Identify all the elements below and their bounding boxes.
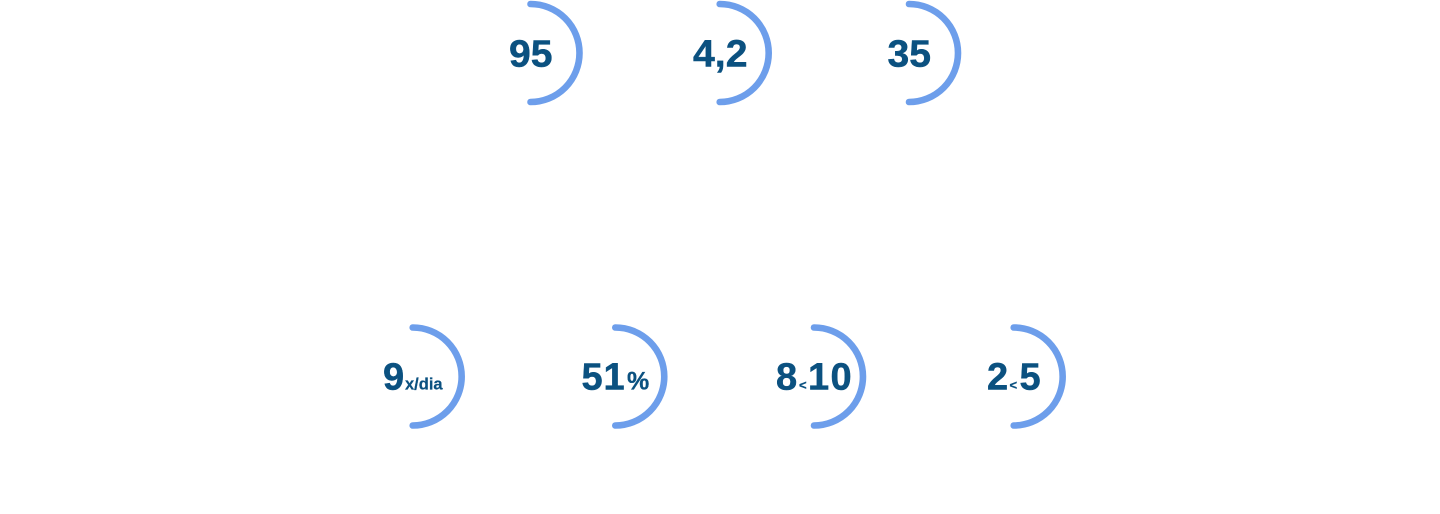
- stat: 51%: 1: [604, 356, 625, 398]
- stat: 8 to 10: 1: [808, 356, 829, 398]
- stat: 8 to 10: <: [799, 378, 807, 392]
- stat: 95: 95: [509, 34, 552, 76]
- stat: 9 x/dia: [383, 328, 462, 426]
- stat: 8 to 10: [776, 328, 863, 426]
- stat: 4,2: 4,2: [693, 34, 748, 76]
- stat: 8 to 10: 8: [776, 356, 797, 398]
- stat: 35: 35: [888, 34, 931, 76]
- stat: 51%: [582, 328, 664, 426]
- stat: 8 to 10: 0: [830, 356, 852, 398]
- stat: 2 to 5: [987, 328, 1063, 426]
- stat: 9 x/dia: x/dia: [405, 376, 443, 394]
- stat: 4,2: [693, 4, 769, 102]
- stat: 51%: 5: [582, 356, 603, 398]
- stat: 2 to 5: <: [1010, 378, 1018, 392]
- stat: 2 to 5: 2: [987, 356, 1008, 398]
- stat: 51%: %: [627, 368, 649, 396]
- stat: 9 x/dia: 9: [383, 356, 404, 398]
- stat: 35: [888, 4, 958, 102]
- stat: 2 to 5: 5: [1020, 356, 1041, 398]
- stat: 95: [509, 4, 580, 102]
